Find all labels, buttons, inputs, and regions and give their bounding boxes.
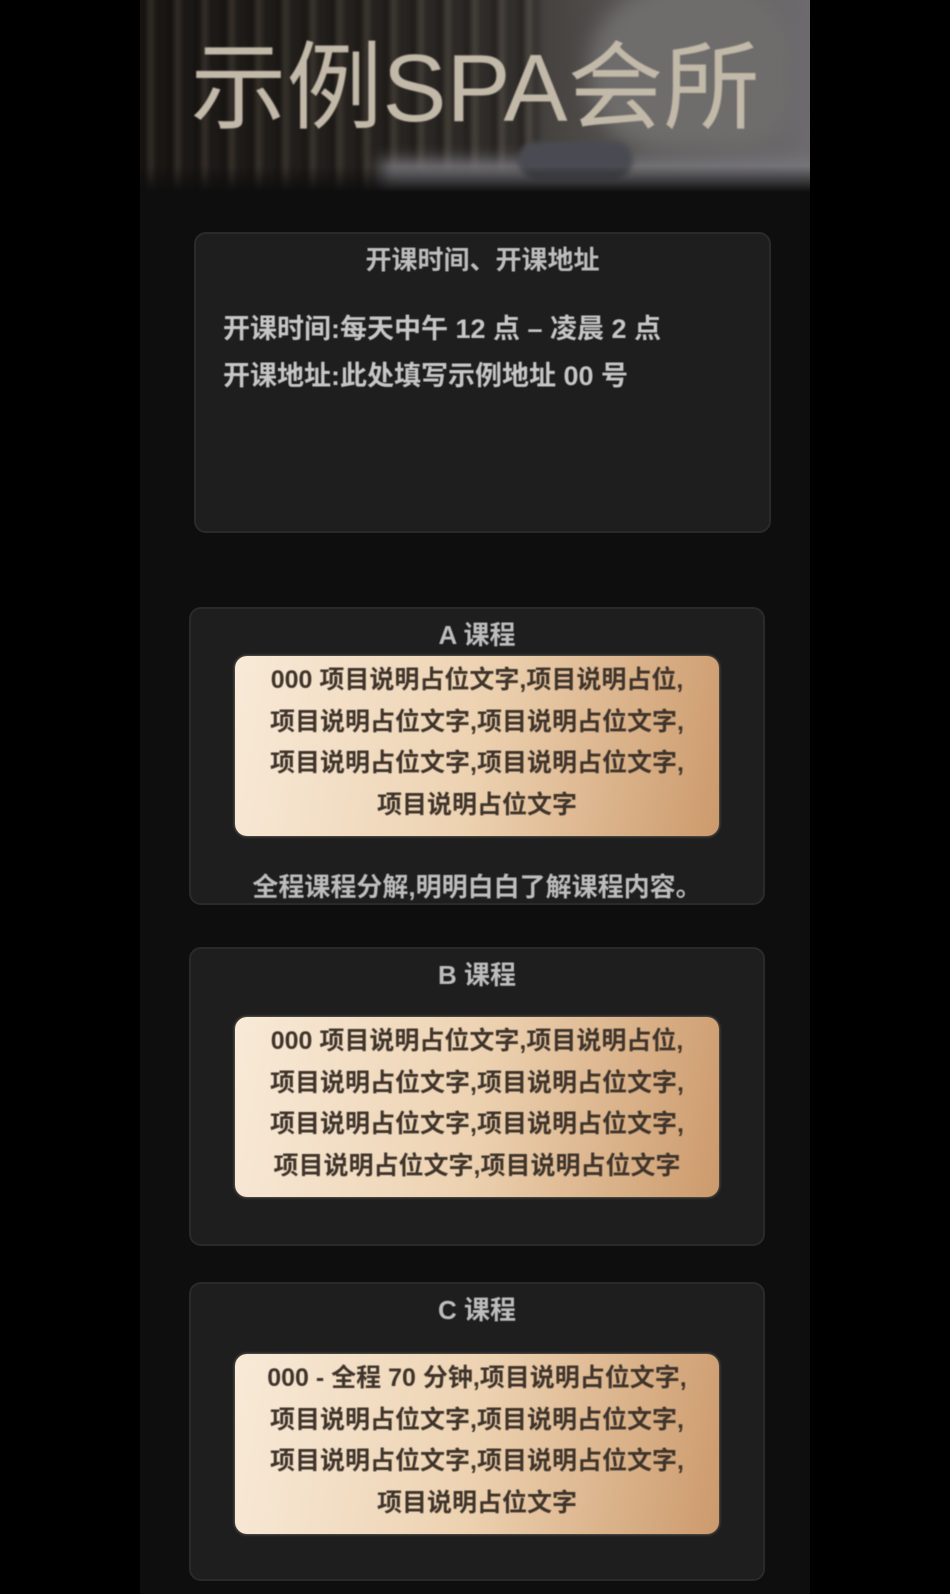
- note: course A: 全程课程分解,明明白白了解课程内容。: [252, 872, 702, 902]
- card: course C details: [235, 1354, 719, 1534]
- panel: time and address: [194, 232, 771, 533]
- title: 示例SPA会所: [191, 35, 759, 142]
- panel heading: time and address: 开课时间、开课地址: [365, 245, 600, 275]
- card: course C details: 项目说明占位文字,项目说明占位文字,: [270, 1406, 684, 1434]
- panel: course C: [189, 1282, 765, 1581]
- card: course C details: 项目说明占位文字: [377, 1488, 577, 1516]
- text: address: 开课地址:此处填写示例地址 00 号: [223, 361, 628, 391]
- panel heading: course A: A 课程: [438, 620, 516, 650]
- card: course B details: 项目说明占位文字,项目说明占位文字,: [270, 1110, 684, 1138]
- card: course A details: 项目说明占位文字,项目说明占位文字,: [270, 708, 684, 736]
- panel: course B: [189, 947, 765, 1246]
- panel heading: course B: B 课程: [438, 960, 516, 990]
- card: course B details: 项目说明占位文字,项目说明占位文字: [274, 1152, 680, 1180]
- header banner: [140, 0, 810, 192]
- panel: course A: [189, 607, 765, 905]
- text: opening hours: 开课时间:每天中午 12 点 – 凌晨 2 点: [223, 314, 661, 344]
- panel heading: course C: C 课程: [438, 1295, 516, 1325]
- card: course B details: [235, 1017, 719, 1197]
- card: course C details: 项目说明占位文字,项目说明占位文字,: [270, 1447, 684, 1475]
- page column: [140, 0, 810, 1594]
- card: course B details: 000 项目说明占位文字,项目说明占位,: [271, 1027, 683, 1055]
- card: course A details: 项目说明占位文字,项目说明占位文字,: [270, 749, 684, 777]
- card: course A details: 项目说明占位文字: [377, 790, 577, 818]
- card: course A details: 000 项目说明占位文字,项目说明占位,: [271, 666, 683, 694]
- card: course B details: 项目说明占位文字,项目说明占位文字,: [270, 1068, 684, 1096]
- card: course C details: 000 - 全程 70 分钟,项目说明占位文字,: [267, 1364, 687, 1392]
- card: course A details: [235, 656, 719, 836]
